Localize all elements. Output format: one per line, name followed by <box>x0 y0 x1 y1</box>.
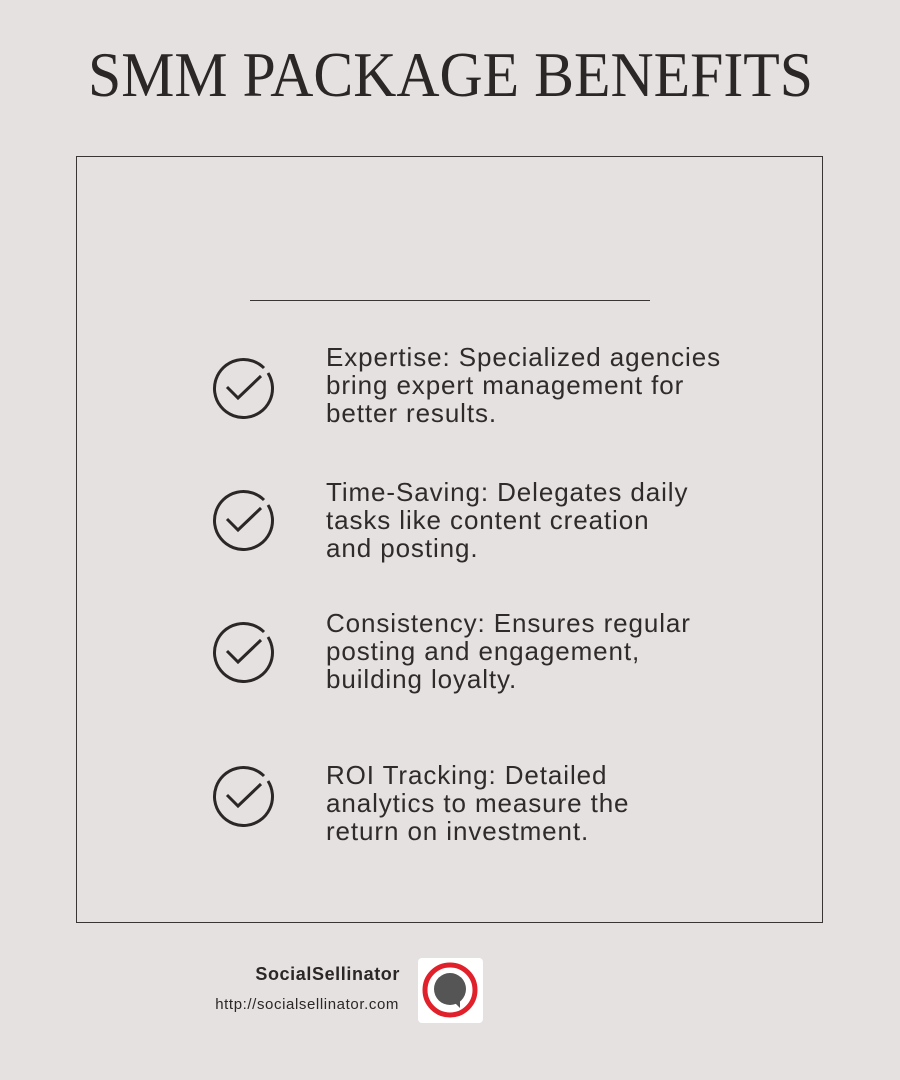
footer: brand name: SocialSellinator <box>255 964 400 984</box>
text: expertise: better results. <box>326 398 497 428</box>
text: time-saving: Time-Saving: Delegates daily <box>326 477 688 507</box>
icon: check 2 <box>213 490 274 551</box>
logo <box>418 958 483 1023</box>
text: consistency <box>326 608 691 694</box>
text: expertise: Expertise: Specialized agencies <box>326 342 721 372</box>
text: roi tracking: return on investment. <box>326 816 589 846</box>
text: roi tracking <box>326 760 629 846</box>
text: roi tracking: analytics to measure the <box>326 788 629 818</box>
text: expertise: bring expert management for <box>326 370 684 400</box>
text: expertise <box>326 342 721 428</box>
text: consistency: building loyalty. <box>326 664 517 694</box>
title: SMM PACKAGE BENEFITS <box>88 39 813 110</box>
text: time-saving <box>326 477 688 563</box>
icon: check 3 <box>213 622 274 683</box>
divider line <box>250 300 650 301</box>
text: roi tracking: ROI Tracking: Detailed <box>326 760 607 790</box>
panel: benefits box <box>76 156 823 923</box>
text: time-saving: tasks like content creation <box>326 505 649 535</box>
text: consistency: Consistency: Ensures regular <box>326 608 691 638</box>
icon: check 1 <box>213 358 274 419</box>
text: time-saving: and posting. <box>326 533 478 563</box>
footer: url: http://socialsellinator.com <box>215 996 399 1013</box>
text: consistency: posting and engagement, <box>326 636 640 666</box>
icon: check 4 <box>213 766 274 827</box>
